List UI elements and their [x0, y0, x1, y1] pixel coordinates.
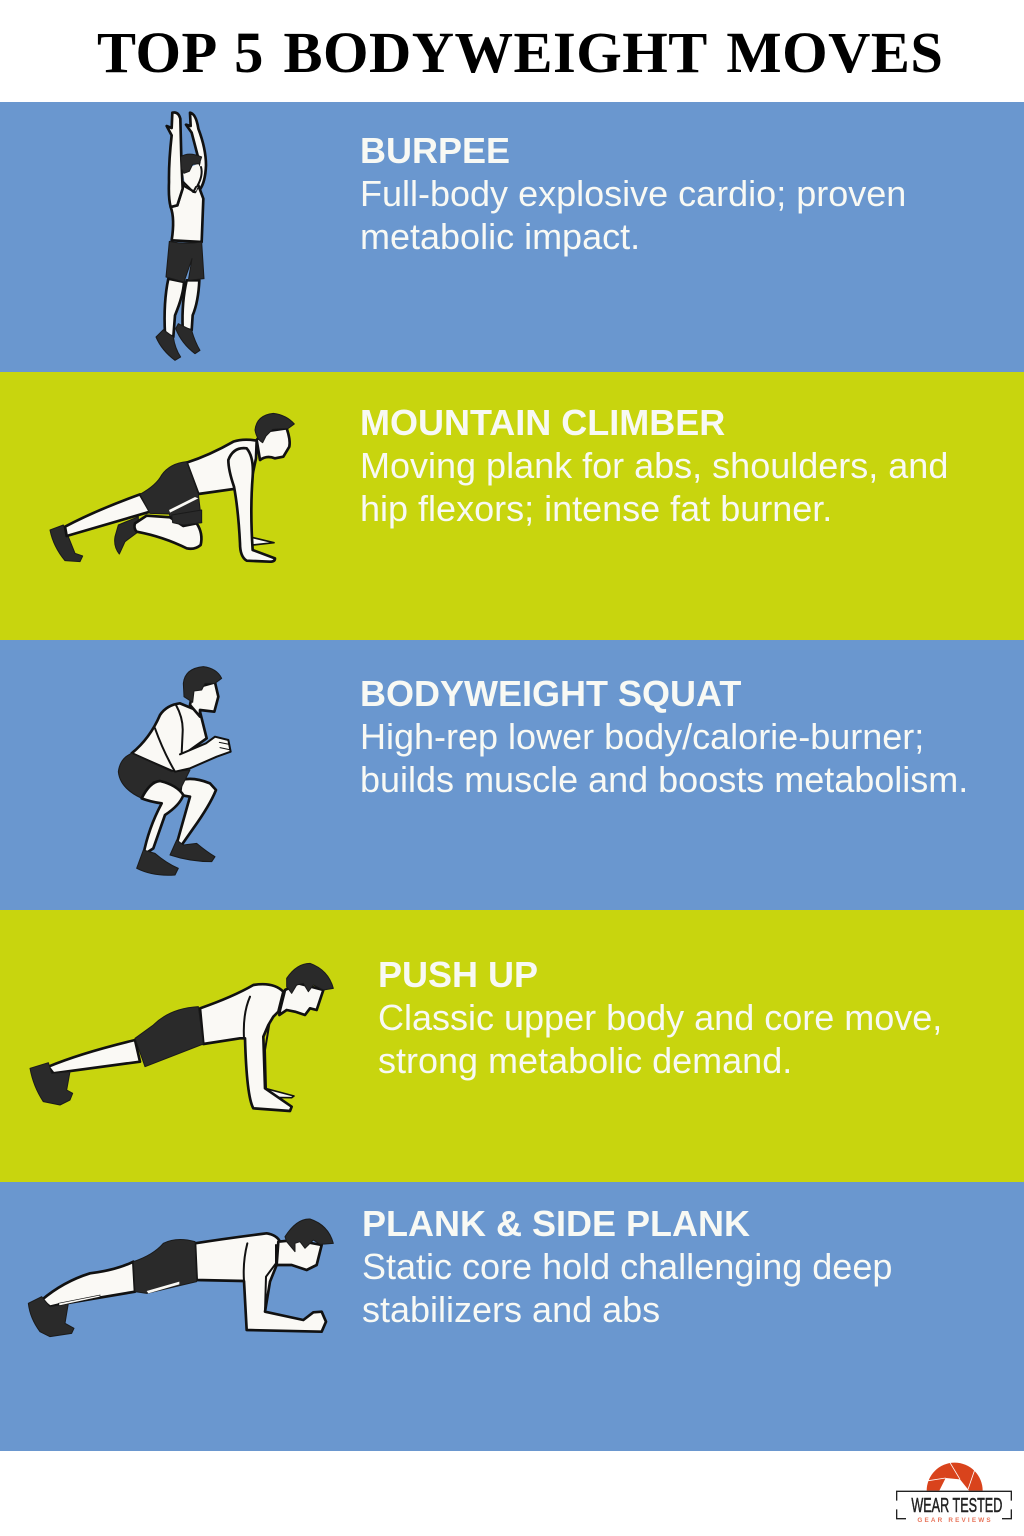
text: push up: Classic upper body and core move,	[378, 997, 942, 1038]
text: bodyweight squat: builds muscle and boosts metabolism.	[360, 759, 968, 800]
icon: squat figure	[118, 666, 232, 876]
text: burpee: BURPEE	[360, 130, 510, 171]
logo: Wear Tested: GEAR REVIEWS	[917, 1517, 991, 1524]
icon: burpee figure	[156, 111, 208, 361]
text: plank and side plank: Static core hold challenging deep	[362, 1246, 892, 1287]
icon: mountain climber figure	[50, 412, 295, 563]
panel: push up	[0, 910, 1024, 1182]
icon: push up figure	[30, 962, 334, 1112]
text: mountain climber: Moving plank for abs, shoulders, and	[360, 445, 948, 486]
text: mountain climber: MOUNTAIN CLIMBER	[360, 402, 725, 443]
text: plank and side plank	[362, 1203, 892, 1330]
text: plank and side plank: PLANK & SIDE PLANK	[362, 1203, 750, 1244]
text: bodyweight squat	[360, 673, 968, 800]
logo: Wear Tested	[896, 1462, 1012, 1524]
text: bodyweight squat: High-rep lower body/calorie-burner;	[360, 716, 924, 757]
title: TOP 5 BODYWEIGHT MOVES	[97, 20, 943, 85]
text: push up: strong metabolic demand.	[378, 1040, 792, 1081]
panel: mountain climber	[0, 372, 1024, 640]
text: burpee: metabolic impact.	[360, 216, 640, 257]
text: plank and side plank: stabilizers and abs	[362, 1289, 660, 1330]
text: burpee: Full-body explosive cardio; proven	[360, 173, 906, 214]
panel: burpee	[0, 102, 1024, 372]
icon: plank figure	[28, 1218, 334, 1338]
panel: bodyweight squat	[0, 640, 1024, 910]
text: mountain climber	[360, 402, 948, 529]
text: bodyweight squat: BODYWEIGHT SQUAT	[360, 673, 741, 714]
panel: plank and side plank	[0, 1182, 1024, 1451]
text: mountain climber: hip flexors; intense fat burner.	[360, 488, 832, 529]
text: push up	[378, 954, 942, 1081]
text: burpee	[360, 130, 906, 257]
text: push up: PUSH UP	[378, 954, 538, 995]
